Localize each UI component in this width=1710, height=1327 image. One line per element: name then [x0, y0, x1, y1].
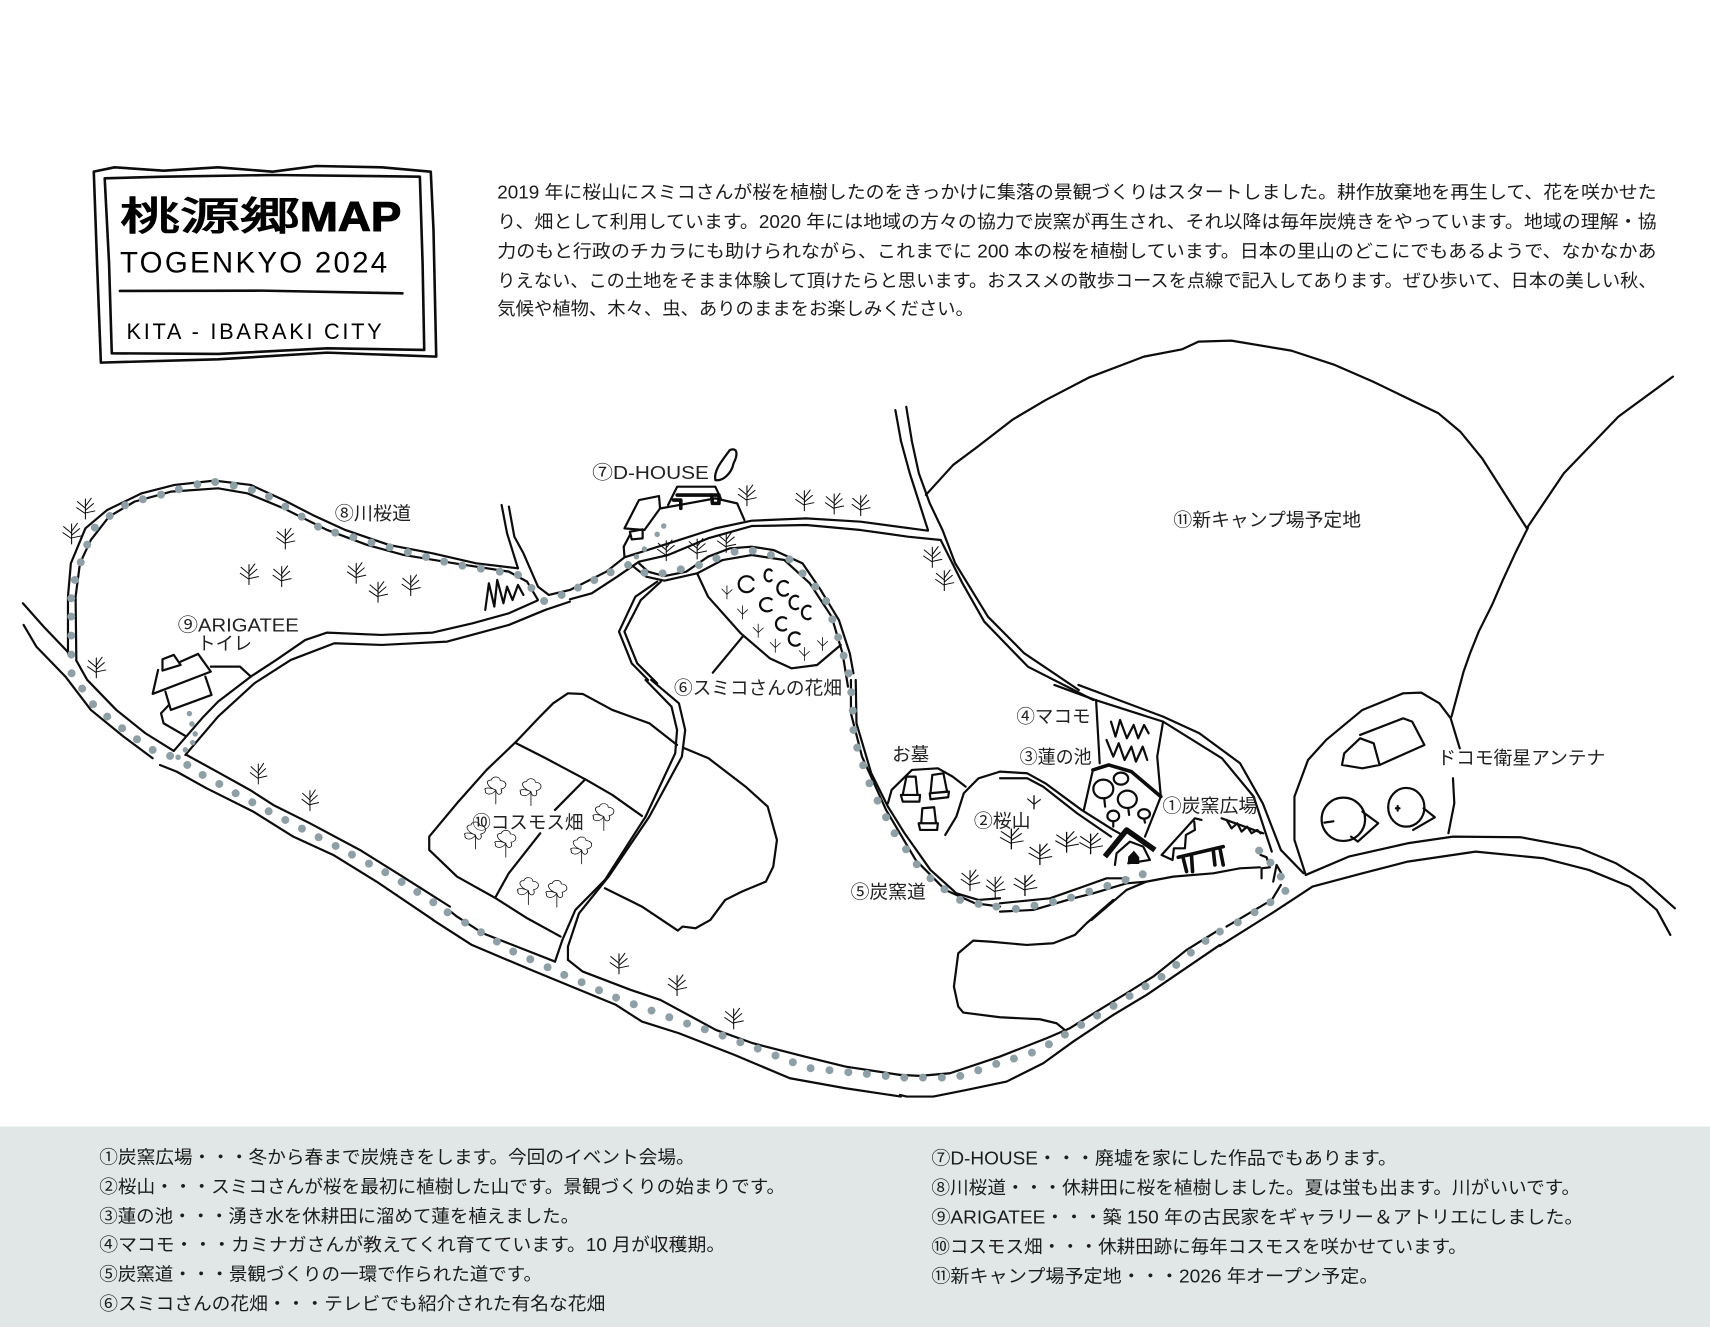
- legend left column: ⑥スミコさんの花畑・・・テレビでも紹介された有名な花畑: [99, 1294, 605, 1314]
- D-house: [624, 449, 736, 539]
- charcoal kiln road: [851, 680, 1303, 1029]
- intro text: りえない、この土地をそまま体験して頂けたらと思います。おススメの散歩コースを点線で記入してあります。ぜひ歩いて、日本の美しい秋、: [497, 271, 1657, 291]
- map labels: ⑧川桜道: [335, 503, 411, 524]
- charcoal kiln: [1105, 830, 1155, 865]
- Arigatee house: [153, 654, 251, 736]
- flower field of Sumiko: [697, 569, 841, 673]
- hill outlines: [926, 341, 1673, 717]
- title box: [94, 166, 436, 363]
- map labels: ⑪新キャンプ場予定地: [1173, 510, 1361, 531]
- legend left column: [99, 1148, 785, 1314]
- map labels: ④マコモ: [1016, 706, 1091, 727]
- bench and flags at kiln plaza: [1162, 818, 1283, 882]
- map labels: ドコモ衛星アンテナ: [1437, 747, 1605, 768]
- Docomo satellite antenna area: [1294, 693, 1460, 875]
- intro text: 力のもと行政のチカラにも助けられながら、これまでに 200 本の桜を植樹しています。日本の里山のどこにでもあるようで、なかなかあ: [497, 240, 1657, 261]
- road segments near D-house and charcoal road: [570, 407, 1093, 700]
- river cherry road: [23, 481, 570, 758]
- cherry trees: [63, 485, 1102, 1029]
- map labels: ⑨ARIGATEE: [178, 614, 299, 635]
- legend left column: ③蓮の池・・・湧き水を休耕田に溜めて蓮を植えました。: [99, 1206, 579, 1227]
- legend left column: ④マコモ・・・カミナガさんが教えてくれ育てています。10 月が収穫期。: [99, 1235, 725, 1255]
- legend right column: ⑩コスモス畑・・・休耕田跡に毎年コスモスを咲かせています。: [931, 1237, 1467, 1257]
- cosmos field: [429, 693, 777, 937]
- lotus pond and makomo field: [1084, 700, 1163, 837]
- map labels: ①炭窯広場: [1163, 795, 1257, 816]
- intro text: 気候や植物、木々、虫、ありのままをお楽しみください。: [497, 298, 974, 319]
- intro text: 2019 年に桜山にスミコさんが桜を植樹したのをきっかけに集落の景観づくりはスタートしました。耕作放棄地を再生して、花を咲かせた: [497, 181, 1657, 202]
- title frame: [94, 166, 436, 363]
- legend right column: ⑨ARIGATEE・・・築 150 年の古民家をギャラリー＆アトリエにしました。: [931, 1208, 1583, 1228]
- map labels: ⑥スミコさんの花畑: [674, 678, 842, 699]
- map: [23, 341, 1675, 1097]
- map labels: トイレ: [197, 633, 252, 654]
- subtitle: TOGENKYO 2024: [120, 247, 387, 280]
- place name: KITA - IBARAKI CITY: [127, 319, 382, 344]
- bottom legend panel: [0, 1127, 1710, 1327]
- map labels: ⑦D-HOUSE: [592, 462, 709, 483]
- legend right column: ⑦D-HOUSE・・・廃墟を家にした作品でもあります。: [931, 1149, 1397, 1169]
- legend right column: ⑧川桜道・・・休耕田に桜を植樹しました。夏は蛍も出ます。川がいいです。: [931, 1177, 1580, 1198]
- legend right column: [931, 1149, 1583, 1287]
- map labels: ③蓮の池: [1020, 746, 1092, 767]
- cosmos side road: [555, 680, 685, 962]
- title MAP: MAP: [300, 193, 401, 240]
- legend left column: ⑤炭窯道・・・景観づくりの一環で作られた道です。: [99, 1264, 542, 1284]
- legend left column: ①炭窯広場・・・冬から春まで炭焼きをします。今回のイベント会場。: [99, 1148, 695, 1168]
- map labels: ⑩コスモス畑: [472, 812, 583, 833]
- legend left column: ②桜山・・・スミコさんが桜を最初に植樹した山です。景観づくりの始まりです。: [99, 1176, 785, 1197]
- graves: [888, 768, 966, 830]
- map labels: ②桜山: [974, 811, 1031, 832]
- reeds at river: [485, 580, 523, 610]
- title heading: 桃源郷: [120, 195, 300, 239]
- main bottom road: [160, 755, 1675, 1097]
- map labels: お墓: [892, 744, 929, 765]
- dotted walking course: [71, 482, 1285, 1078]
- intro text: り、畑として利用しています。2020 年には地域の方々の協力で炭窯が再生され、それ以降は毎年炭焼きをやっています。地域の理解・協: [497, 212, 1657, 232]
- map labels: [178, 462, 1605, 903]
- intro text: [497, 181, 1657, 319]
- map labels: ⑤炭窯道: [851, 882, 926, 903]
- legend right column: ⑪新キャンプ場予定地・・・2026 年オープン予定。: [931, 1267, 1378, 1287]
